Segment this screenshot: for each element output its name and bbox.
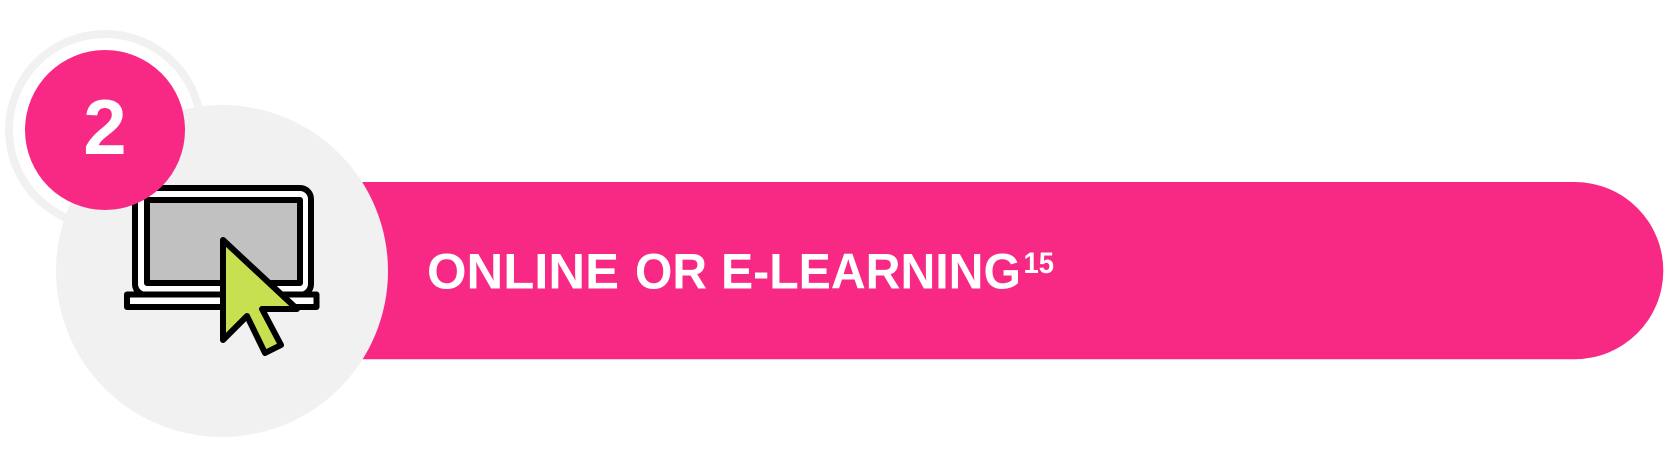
number badge outer ring <box>9 34 201 226</box>
icon: laptop with cursor <box>127 188 316 353</box>
number badge <box>25 50 185 210</box>
pink title band <box>300 182 1663 359</box>
cursor arrow <box>223 240 297 353</box>
laptop lid <box>135 188 311 295</box>
laptop base <box>127 294 316 307</box>
title word: e-learning: E-LEARNING <box>721 244 1021 300</box>
badge number: 2 <box>83 83 127 171</box>
badge circle <box>25 50 185 210</box>
laptop screen <box>147 200 300 283</box>
footnote reference: 15 <box>1024 247 1054 280</box>
large grey circle <box>56 105 388 437</box>
title <box>427 244 1054 300</box>
title word: online: ONLINE <box>427 244 619 300</box>
title word: or: OR <box>635 244 707 300</box>
